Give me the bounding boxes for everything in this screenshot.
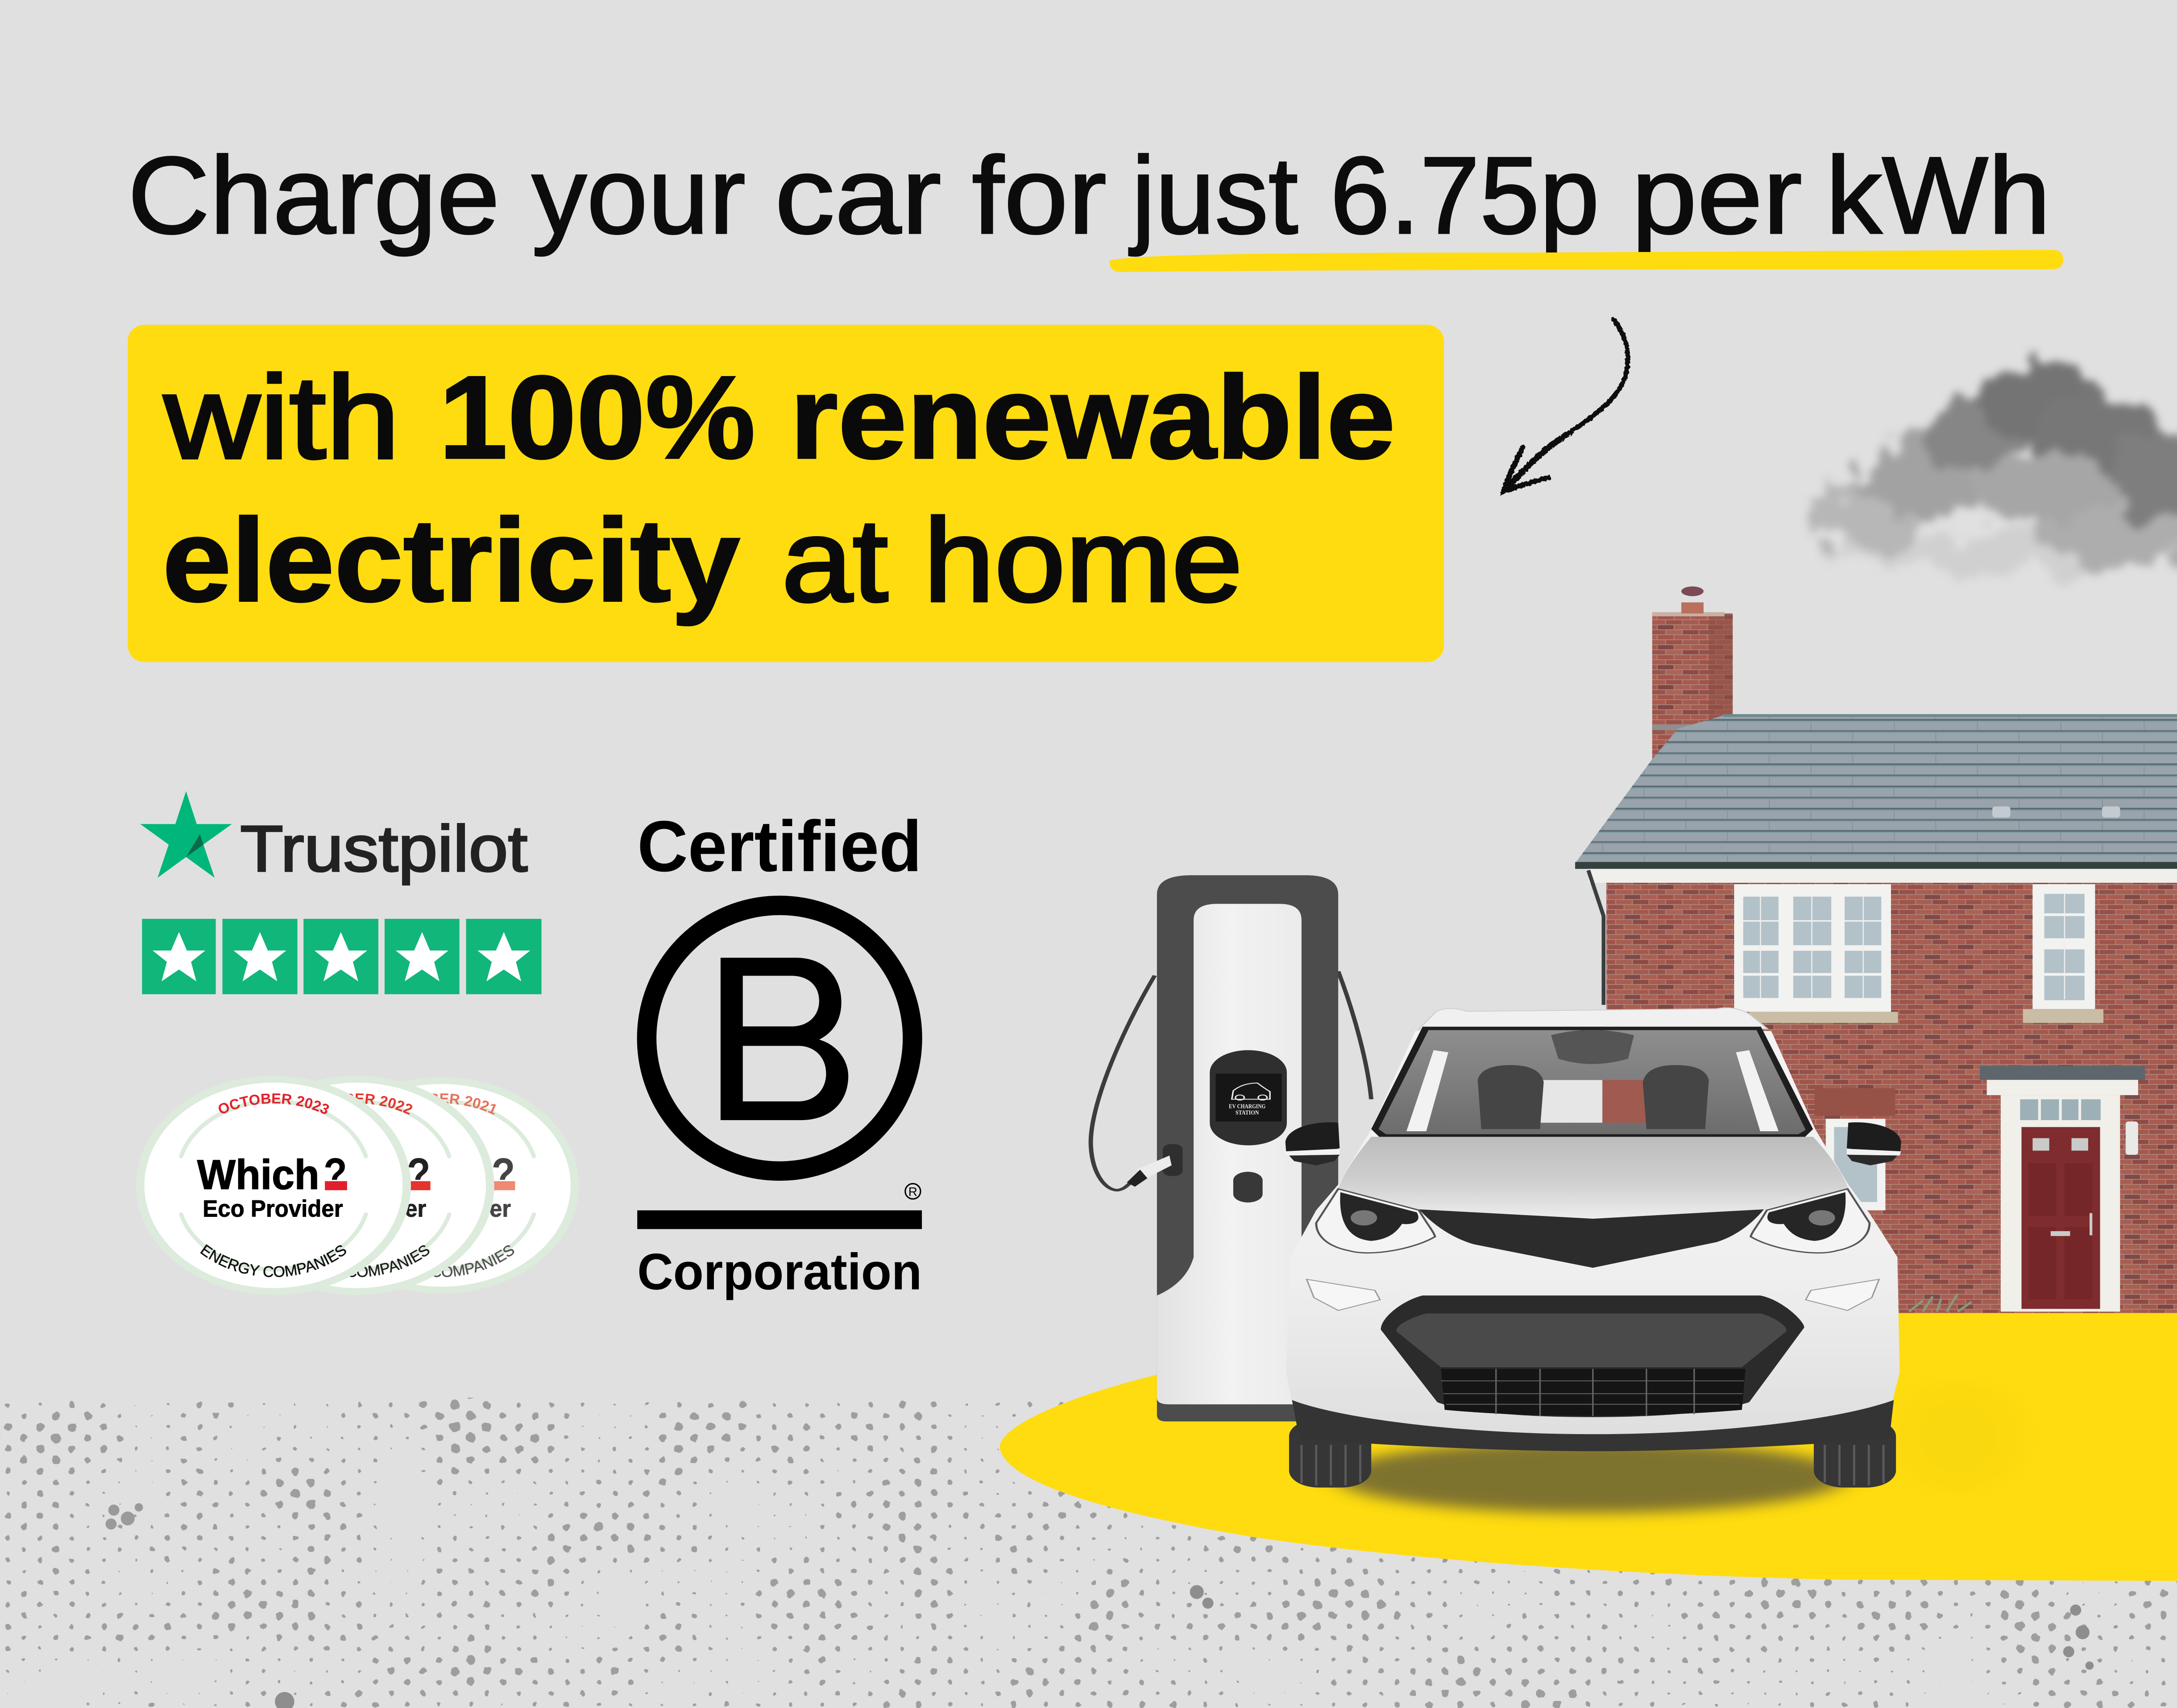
right tyre — [1814, 1419, 1896, 1488]
badge 2023: OCTOBER 2023 — [216, 1090, 332, 1118]
title: Charge — [128, 134, 500, 257]
charger screen: STATION — [1236, 1109, 1259, 1116]
title: per — [1631, 134, 1802, 257]
downpipe — [1588, 870, 1604, 1005]
right headlight — [1751, 1189, 1870, 1253]
title: just — [1129, 134, 1298, 257]
shrub — [1909, 1294, 1971, 1311]
badge 2022: Which — [281, 1152, 402, 1198]
headline line 1: with — [162, 352, 400, 484]
title: 6.75p — [1330, 134, 1600, 257]
Which? badges — [136, 1076, 579, 1295]
speckled ground texture — [0, 1388, 2177, 1708]
charger body — [1157, 875, 1338, 1421]
title — [128, 134, 2051, 257]
badge 2022 — [220, 1076, 494, 1295]
badge 2022: Eco Provider — [286, 1196, 426, 1222]
title: for — [972, 134, 1107, 257]
title: your — [532, 134, 746, 257]
letter B — [721, 958, 848, 1120]
chimney — [1652, 587, 1733, 769]
windscreen — [1371, 1027, 1813, 1137]
five star rating — [142, 919, 542, 994]
badge 2022: OCTOBER 2022 — [299, 1090, 415, 1118]
plug — [1127, 1144, 1182, 1187]
small window — [2023, 884, 2103, 1023]
roof — [1575, 714, 2177, 883]
lower window — [1815, 1088, 1895, 1210]
badge 2023: Which — [197, 1152, 319, 1198]
car body — [1286, 1031, 1899, 1439]
bonnet — [1338, 1137, 1848, 1218]
cloud — [1809, 364, 2177, 571]
yellow underline — [1109, 250, 2063, 272]
porch and door — [1980, 1066, 2145, 1311]
car — [1285, 1008, 1901, 1488]
bumper — [1292, 1400, 1894, 1451]
charger screen — [1210, 1050, 1287, 1146]
badge 2021: Eco Provider — [371, 1196, 511, 1222]
Trustpilot wordmark: Trustpilot — [240, 812, 527, 885]
car shadow — [1335, 1381, 2024, 1513]
charger and car — [1091, 875, 2024, 1513]
badge 2021: Which — [365, 1152, 487, 1198]
badge 2021: ENERGY COMPANIES — [365, 1241, 518, 1281]
registered mark — [905, 1184, 921, 1199]
headline line 2 — [162, 495, 1243, 627]
Corporation text: Corporation — [637, 1244, 922, 1301]
headline line 1: 100% renewable — [439, 352, 1395, 484]
headline line 2: electricity — [162, 495, 741, 627]
house — [1575, 587, 2177, 1313]
bar — [637, 1210, 922, 1229]
title: car — [775, 134, 941, 257]
charger screen: EV CHARGING — [1229, 1103, 1266, 1110]
badge 2022: ? — [407, 1150, 431, 1199]
charging cables — [1091, 971, 1371, 1190]
Trustpilot logo — [140, 791, 527, 885]
upper grille — [1419, 1209, 1764, 1268]
badge 2021 — [304, 1077, 579, 1294]
badge 2022: ENERGY COMPANIES — [281, 1241, 433, 1281]
arrow — [1504, 319, 1628, 492]
badge 2021: ? — [492, 1150, 515, 1199]
headline line 2: at home — [782, 495, 1243, 626]
badge 2023: ? — [323, 1150, 347, 1199]
panel: yellow headline box — [128, 325, 1444, 662]
registered mark: R — [908, 1185, 917, 1199]
large window — [1734, 884, 1898, 1023]
car roof — [1419, 1008, 1767, 1029]
left headlight — [1316, 1189, 1435, 1253]
brick wall — [1606, 877, 2177, 1313]
yellow ground — [999, 1313, 2177, 1581]
badge 2023: Eco Provider — [203, 1196, 343, 1222]
lower grille — [1381, 1295, 1804, 1417]
B circle — [647, 906, 912, 1171]
left tyre — [1289, 1419, 1371, 1488]
Trustpilot star — [140, 791, 232, 878]
contactless reader — [1233, 1172, 1263, 1203]
Certified heading: Certified — [637, 806, 922, 887]
EV charging station — [1091, 875, 1371, 1421]
title: kWh — [1826, 134, 2051, 257]
fog lights — [1306, 1279, 1879, 1311]
Certified B Corporation logo — [637, 806, 922, 1301]
right mirror — [1847, 1122, 1901, 1166]
badge 2023 — [136, 1076, 411, 1295]
left mirror — [1285, 1122, 1339, 1166]
badge 2021: OCTOBER 2021 — [383, 1090, 500, 1118]
badge 2023: ENERGY COMPANIES — [197, 1241, 350, 1281]
